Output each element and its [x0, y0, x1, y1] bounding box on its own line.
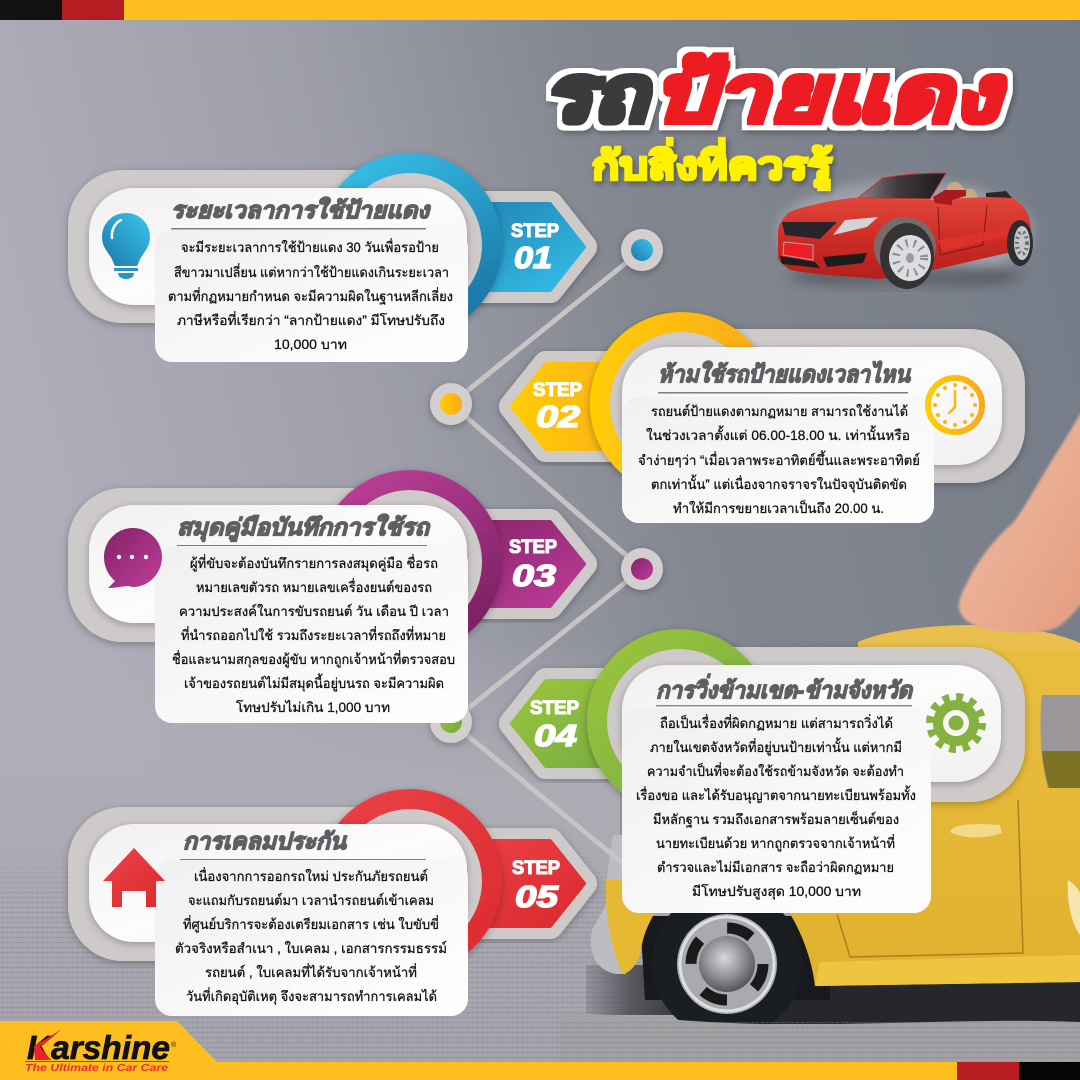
text block: [155, 546, 468, 723]
colored ring: [318, 470, 502, 654]
text block: จำง่ายๆว่า “เมื่อเวลาพระอาทิตย์ขึ้นและพระอาทิตย์: [638, 450, 920, 468]
text block: นายทะเบียนด้วย หากถูกตรวจจากเจ้าหน้าที่: [656, 834, 895, 852]
text block: ที่นำรถออกไปใช้ รวมถึงระยะเวลาที่รถถึงที่หมาย: [181, 626, 446, 643]
door panel outline: [837, 800, 1023, 957]
photo: yellow toy car: [560, 625, 1080, 1062]
step badge 03: [440, 522, 584, 606]
text block: [622, 397, 934, 523]
inner white card: [89, 188, 467, 305]
logo swoosh: [34, 1029, 62, 1060]
node: step 4: [430, 701, 472, 743]
wheel well: [640, 916, 830, 1000]
window: [1040, 695, 1080, 788]
text block: โทษปรับไม่เกิน 1,000 บาท: [236, 699, 390, 715]
text block: ผู้ที่ขับจะต้องบันทึกรายการลงสมุดคู่มือ ชื่อรถ: [190, 554, 438, 572]
body highlight: [938, 225, 1026, 252]
inner white card: [89, 824, 467, 942]
step badge 02: [512, 364, 650, 449]
door mirror and door top: [933, 190, 966, 205]
outer card: [625, 647, 1025, 802]
icon: gear: [931, 698, 981, 748]
step badge 05: 05: [515, 879, 559, 914]
license plate: [783, 242, 813, 260]
dark fabric by wheel: [586, 965, 676, 1015]
step badge 05: STEP: [512, 858, 560, 879]
logo tagline: The Ultimate in Car Care: [25, 1062, 168, 1074]
heading: การเคลมประกัน: [183, 828, 347, 854]
photo: finger: [959, 411, 1080, 632]
text block: ความประสงค์ในการขับรถยนต์ วัน เดือน ปี เวลา: [179, 603, 449, 619]
text block: ตกเท่านั้น” แต่เนื่องจากจราจรในปัจจุบันติดขัด: [651, 474, 907, 493]
text block: [155, 860, 468, 1016]
text block: ภาษีหรือที่เรียกว่า “ลากป้ายแดง” มีโทษปรับถึง: [177, 311, 445, 328]
car glow: [777, 180, 1033, 284]
car ground shadow: [790, 266, 1020, 286]
text block: มีโทษปรับสูงสุด 10,000 บาท: [692, 883, 861, 900]
text block: รถยนต์ , ใบเคลมที่ได้รับจากเจ้าหน้าที่: [205, 963, 417, 980]
colored ring: [590, 312, 774, 496]
text block: ความจำเป็นที่จะต้องใช้รถข้ามจังหวัด จะต้องทำ: [647, 762, 904, 779]
door highlight: [1068, 880, 1080, 935]
step badge 02: STEP: [533, 380, 582, 401]
outer card: [68, 488, 468, 642]
logo wordmark: Karshine: [27, 1029, 170, 1066]
car fender: [606, 880, 654, 973]
step badge 04: 04: [534, 718, 577, 753]
subtitle: กับสิ่งที่ควรรู้: [592, 138, 832, 190]
node: step 3: [621, 548, 663, 590]
front wheel: [874, 217, 936, 289]
sill: [815, 955, 1080, 986]
panel: step 5: [68, 789, 584, 1016]
seats: [945, 182, 978, 198]
illustration: red convertible car: [777, 173, 1033, 289]
icon: house: [103, 848, 165, 907]
top bar: [0, 0, 1080, 20]
panel: step 3: [68, 470, 584, 723]
text block: ตัวจริงหรือสำเนา , ใบเคลม , เอกสารกรรมธรรม์: [175, 940, 447, 956]
text block: [155, 230, 468, 362]
node: step 1: [621, 229, 663, 271]
colored ring: [318, 153, 502, 337]
text block: เนื่องจากการออกรถใหม่ ประกันภัยรถยนต์: [194, 867, 428, 884]
chrome bumper: [591, 835, 626, 974]
heading: สมุดคู่มือบันทึกการใช้รถ: [177, 513, 431, 542]
door handle: [950, 824, 1002, 837]
step badge 03: 03: [512, 558, 556, 593]
icon: light bulb: [102, 213, 150, 279]
heading: ห้ามใช้รถป้ายแดงเวลาไหน: [658, 360, 911, 387]
colored ring: [318, 789, 502, 973]
windshield: [858, 173, 946, 199]
step badge 04: [512, 681, 650, 766]
panel: step 1: [68, 153, 584, 362]
body: [778, 197, 1031, 279]
panel: step 2: [512, 312, 1025, 523]
step badge 01: [440, 204, 584, 290]
tire and hub: [652, 888, 802, 1038]
step badge 04: STEP: [530, 698, 579, 719]
headlight: [833, 217, 878, 235]
colored ring: [587, 629, 771, 813]
text block: ตำรวจและไม่มีเอกสาร จะถือว่าผิดกฏหมาย: [657, 860, 894, 875]
lower grille: [780, 256, 820, 268]
text block: ตามที่กฏหมายกำหนด จะมีความผิดในฐานหลีกเลี่ยง: [168, 287, 453, 305]
car roof: [858, 625, 1080, 720]
text block: ชื่อและนามสกุลของผู้ขับ หากถูกเจ้าหน้าที่ตรวจสอบ: [172, 650, 455, 668]
text block: ถือเป็นเรื่องที่ผิดกฏหมาย แต่สามารถวิ่งได้: [660, 714, 893, 731]
outer card: [68, 170, 468, 323]
text block: สีขาวมาเปลี่ยน แต่หากว่าใช้ป้ายแดงเกินระยะเวลา: [174, 263, 449, 280]
rear wheel: [1007, 220, 1033, 266]
inner white card: [622, 347, 1002, 465]
grille: [782, 222, 837, 239]
heading: การวิ่งข้ามเขต-ข้ามจังหวัด: [656, 673, 914, 703]
title word: dark: รถ: [543, 50, 653, 138]
title: [543, 50, 1006, 138]
text block: ภายในเขตจังหวัดที่อยู่บนป้ายเท่านั้น แต่หากมี: [650, 737, 902, 756]
text block: เรื่องขอ และได้รับอนุญาตจากนายทะเบียนพร้อมทั้ง: [636, 785, 916, 804]
node: step 2: [430, 383, 472, 425]
panel: step 4: [512, 629, 1025, 913]
text block: ที่ศูนย์บริการจะต้องเตรียมเอกสาร เช่น ใบขับขี่: [183, 915, 439, 933]
logo tab: Karshine: [0, 1021, 217, 1080]
bottom bar: [0, 1062, 1080, 1080]
step badge 02: 02: [536, 399, 580, 434]
text block: มีหลักฐาน รวมถึงเอกสารพร้อมลายเซ็นต์ของ: [653, 810, 899, 828]
step badge 03: STEP: [509, 537, 557, 558]
logo registered mark: ®: [171, 1041, 177, 1049]
text block: [622, 708, 931, 913]
title word: red: ป้ายแดง: [652, 50, 1006, 138]
text block: 10,000 บาท: [274, 337, 347, 352]
car body: [790, 650, 1080, 986]
heading: ระยะเวลาการใช้ป้ายแดง: [171, 196, 431, 223]
text block: ทำให้มีการขยายเวลาเป็นถึง 20.00 น.: [673, 499, 884, 516]
text block: เจ้าของรถยนต์ไม่มีสมุดนี้อยู่บนรถ จะมีความผิด: [184, 673, 444, 692]
fabric front: [560, 1013, 1080, 1062]
text block: จะมีระยะเวลาการใช้ป้ายแดง 30 วันเพื่อรอป้าย: [181, 238, 439, 255]
text block: หมายเลขตัวรถ หมายเลขเครื่องยนต์ของรถ: [196, 578, 432, 595]
outer card: [625, 329, 1025, 483]
outer card: [68, 807, 468, 961]
connector lines: [451, 250, 642, 865]
text block: รถยนต์ป้ายแดงตามกฏหมาย สามารถใช้งานได้: [651, 403, 908, 419]
icon: speech bubble: [104, 528, 162, 588]
step badge 01: 01: [514, 240, 552, 275]
text block: จะแถมกับรถยนต์มา เวลานำรถยนต์เข้าเคลม: [188, 892, 434, 908]
door lines: [938, 205, 987, 255]
step badge 01: STEP: [511, 221, 559, 242]
inner white card: [89, 505, 467, 623]
text block: ในช่วงเวลาตั้งแต่ 06.00-18.00 น. เท่านั้นหรือ: [646, 425, 910, 443]
step badge 05: [440, 841, 584, 926]
inner white card: [622, 665, 1001, 782]
text block: วันที่เกิดอุบัติเหตุ จึงจะสามารถทำการเคลมได้: [186, 987, 437, 1005]
car shadow: [770, 980, 1080, 1024]
icon: clock: [928, 378, 982, 432]
